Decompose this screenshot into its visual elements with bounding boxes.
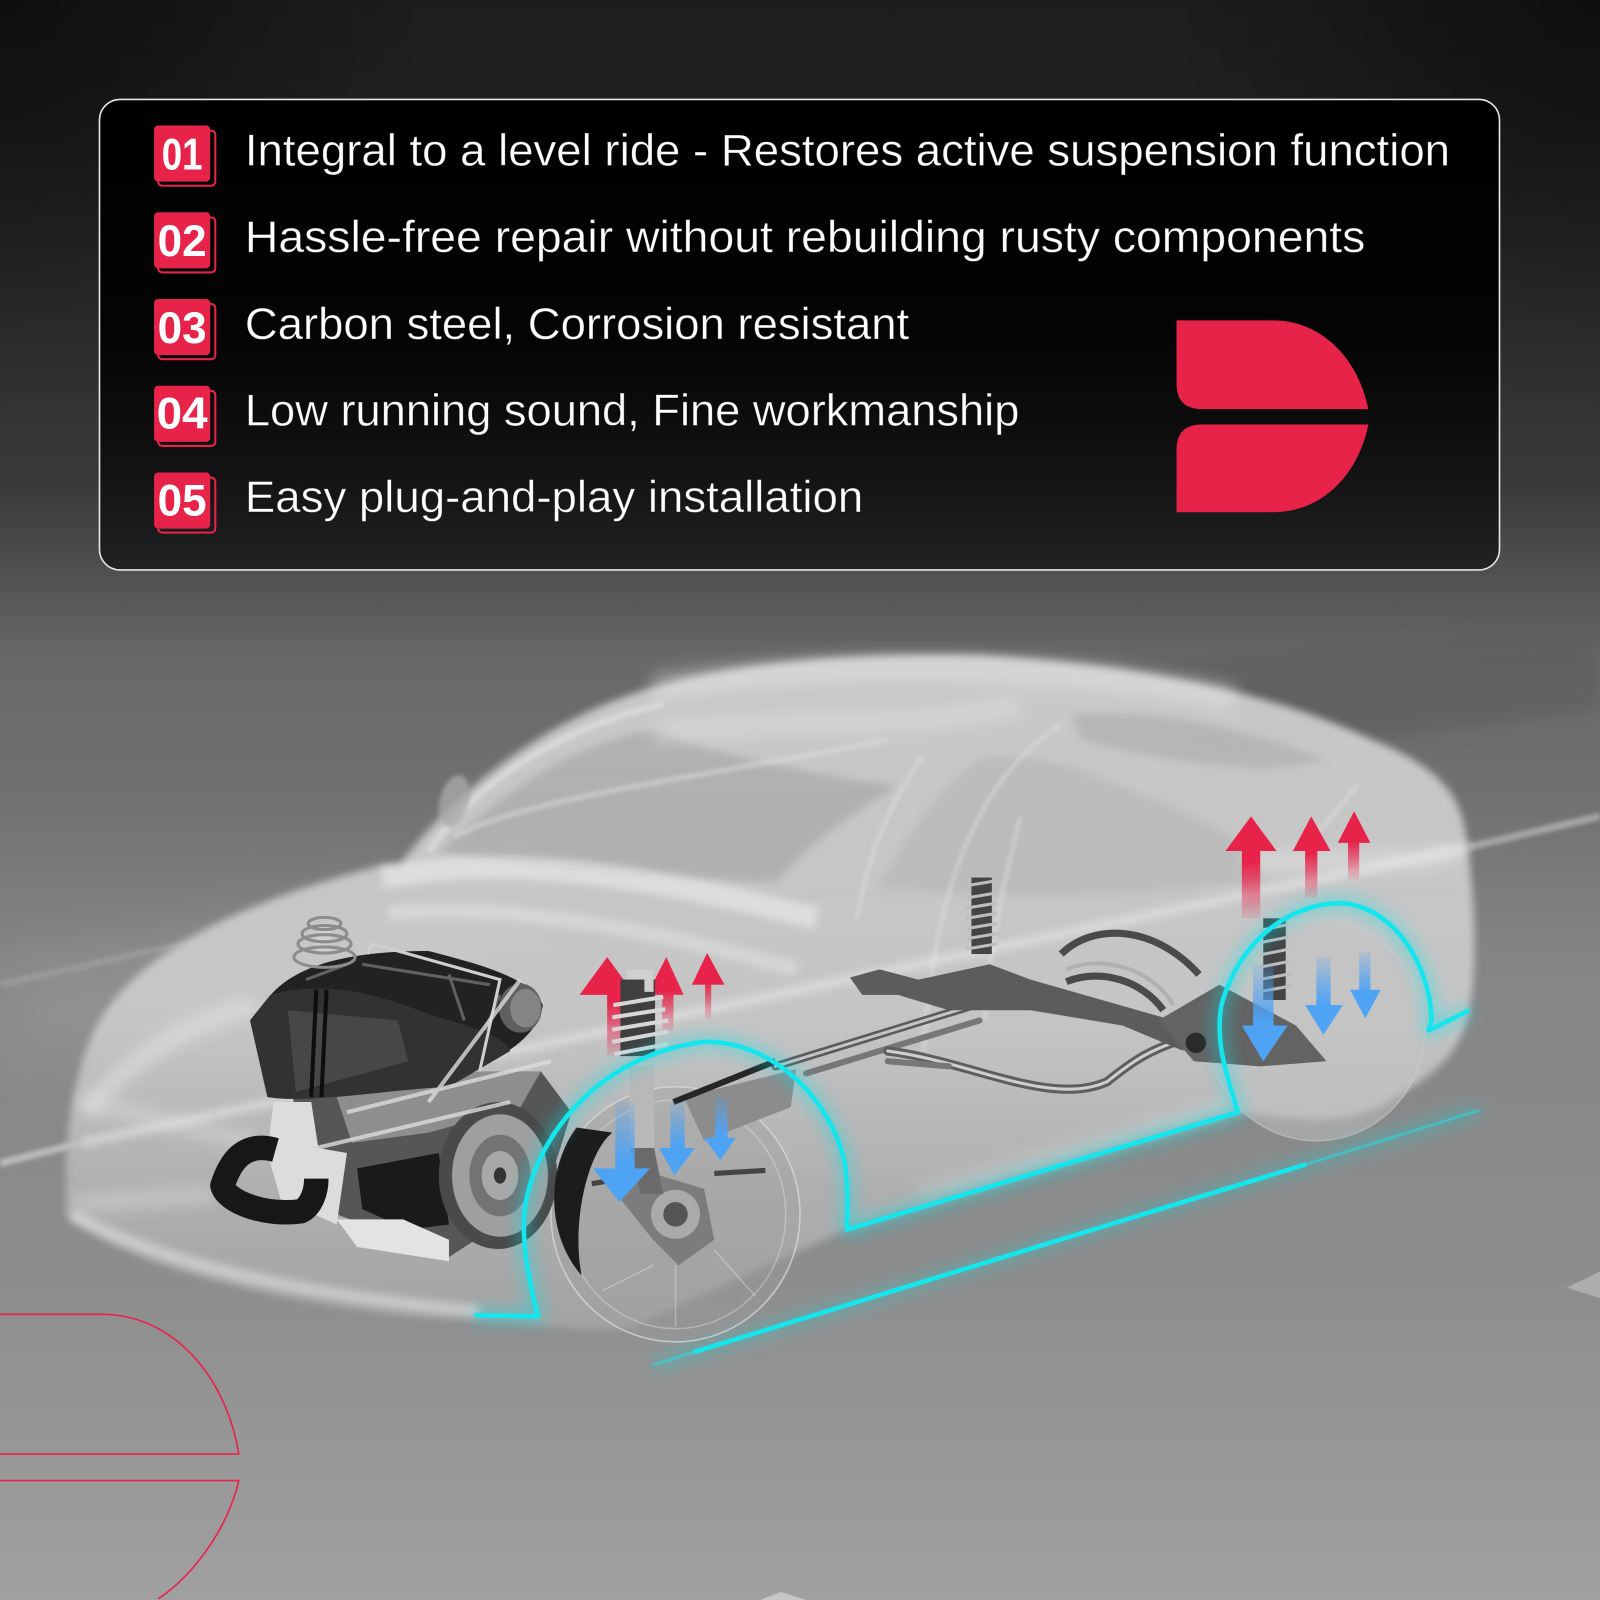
item 03: 03 bbox=[158, 302, 207, 353]
rear axle bbox=[850, 878, 1327, 1066]
rear red up arrows bbox=[1226, 811, 1370, 918]
transmission block bbox=[357, 1153, 449, 1230]
rear arch tubes bbox=[1061, 933, 1199, 1010]
engine lower housing bbox=[291, 1071, 571, 1257]
item 01: 01 bbox=[162, 128, 203, 179]
logo bbox=[1177, 320, 1368, 512]
rear lower arm bbox=[1158, 985, 1327, 1066]
brake shield bbox=[554, 1128, 612, 1276]
engine bbox=[222, 917, 571, 1261]
air box bbox=[250, 989, 510, 1099]
windscreen and windows bbox=[71, 669, 1469, 1311]
turbo column bbox=[267, 1102, 347, 1224]
cyan glowing wheel-arch outline bbox=[474, 903, 1469, 1316]
item 02: 02 bbox=[158, 215, 207, 266]
item 04: 04 bbox=[157, 388, 208, 439]
right rear spring bbox=[1259, 918, 1292, 1000]
front suspension bbox=[554, 1061, 796, 1276]
oil pan bbox=[337, 1219, 449, 1261]
chassis exhaust tubes bbox=[776, 988, 1179, 1089]
item 05: Easy plug-and-play installation bbox=[245, 471, 863, 522]
throttle body bbox=[499, 984, 542, 1033]
front red up arrows bbox=[580, 953, 724, 1056]
mid rear spring bbox=[966, 878, 997, 954]
item 05: 05 bbox=[158, 474, 207, 525]
engine highlight pipes bbox=[316, 980, 551, 1148]
info panel bbox=[99, 99, 1499, 570]
flywheel bbox=[439, 1102, 557, 1249]
rear wheel bbox=[1208, 920, 1424, 1141]
pipe frame bbox=[367, 944, 500, 1071]
decorative red outline logo, bottom left bbox=[0, 1314, 239, 1599]
front wheel bbox=[551, 1087, 800, 1342]
rear beam bbox=[850, 964, 1184, 1051]
engine top cover bbox=[263, 951, 543, 1061]
strut bbox=[630, 1066, 654, 1153]
translucent car bbox=[66, 655, 1474, 1342]
black hose bbox=[222, 1148, 316, 1212]
item 01: Integral to a level ride - Restores active suspension function bbox=[245, 124, 1450, 175]
item 02: Hassle-free repair without rebuilding rusty components bbox=[245, 211, 1365, 262]
car body silhouette bbox=[66, 655, 1474, 1330]
item 04: Low running sound, Fine workmanship bbox=[245, 385, 1019, 436]
top spring bbox=[294, 917, 355, 967]
knuckle and control arm bbox=[612, 1173, 714, 1265]
mirror bbox=[433, 772, 475, 830]
strut lower body bbox=[630, 1148, 663, 1194]
cyan glowing ground line bbox=[653, 1110, 1480, 1365]
item 03: Carbon steel, Corrosion resistant bbox=[245, 298, 910, 349]
rear blue down arrows bbox=[1242, 952, 1381, 1061]
front blue down arrows bbox=[593, 1097, 736, 1202]
front spring coil bbox=[612, 974, 668, 1056]
